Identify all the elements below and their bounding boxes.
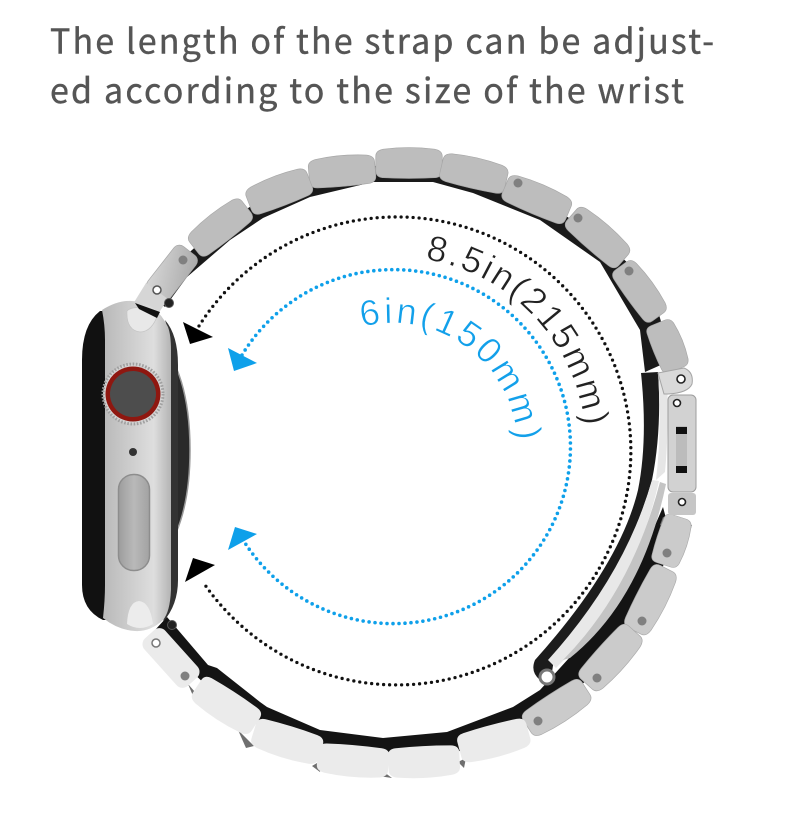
bottom strap lug [127,601,153,628]
clasp [533,368,696,684]
label 6in: 6in(150mm) [361,297,542,438]
silver body [102,301,171,631]
clasp window [676,426,687,473]
grey blade [563,482,666,660]
bottom strap joint [152,620,176,647]
side button [118,474,150,570]
top links [144,148,692,375]
top strap connector [133,283,168,314]
bottom links [139,625,533,780]
link pins [178,178,672,726]
band gap shadows [188,517,692,778]
arrowhead bottom [185,558,215,582]
right and lower-right links [519,512,694,740]
arrowhead bottom [228,527,257,550]
watch face black edge [82,311,110,620]
label 8.5in: 8.5in(215mm) [428,236,609,423]
watch band [133,148,694,780]
clasp pins [674,375,686,506]
title: ed according to the size of the wrist [50,64,684,113]
microphone hole [129,448,137,456]
back sensor [176,367,190,533]
lower white blade [548,480,659,668]
upper white blade [656,372,668,480]
title: The length of the strap can be adjust- [50,14,714,64]
black band underside, bottom [155,507,672,762]
upper lug [658,368,692,394]
black measure: 8.5in arc [183,217,631,685]
watch [82,286,190,647]
inner black strap [533,372,659,680]
clasp box [668,395,696,492]
lower clasp lug [668,493,696,515]
arrowhead top [228,348,257,371]
arrowhead top [183,322,213,344]
top strap lug [127,308,158,332]
top strap joint [135,286,174,318]
release ring [540,670,554,684]
watch back dark edge [163,320,178,622]
title [50,14,714,113]
digital crown [103,364,163,424]
blue measure: 6in arc [228,270,570,624]
black band underside, top [150,162,672,372]
